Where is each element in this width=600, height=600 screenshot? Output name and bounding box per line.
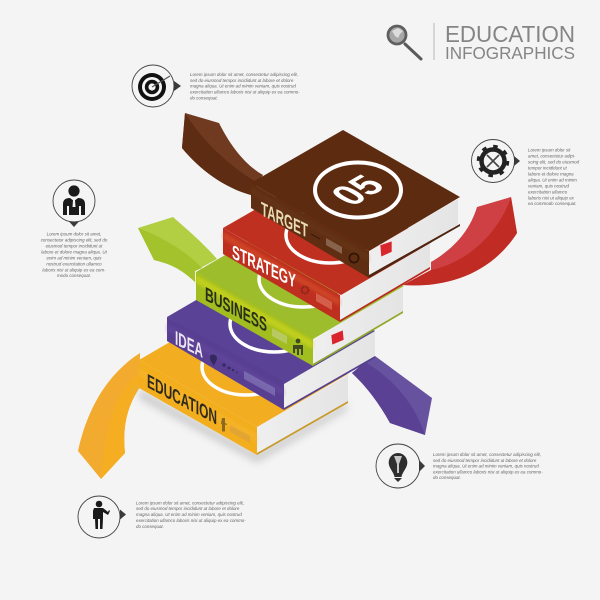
education pages — [257, 375, 348, 453]
callout: presenter — [78, 496, 246, 538]
education spine text box — [230, 425, 250, 443]
callout text: idea bulb: sed do eiusmod tempor incididunt ut labore et dolore — [433, 458, 537, 463]
business ring — [259, 251, 347, 307]
idea label: IDEA — [175, 327, 203, 363]
callout text: gear: tempor incididunt ut — [528, 166, 567, 170]
target spine text box — [326, 238, 342, 254]
callout text: gear: laboris nisi ut aliquip ex — [528, 195, 575, 200]
callout text: gear: ea commodo consequat. — [528, 201, 577, 206]
callout text: presenter: do consequat. — [136, 524, 164, 529]
education cover — [139, 307, 348, 427]
callout text: gear: amet, consectetur adipi- — [528, 154, 576, 158]
header title: EDUCATION — [445, 21, 575, 47]
header divider — [433, 23, 435, 60]
icon: people — [293, 339, 303, 355]
icon: gear badge — [472, 140, 520, 182]
education ring — [202, 339, 290, 395]
callout text: gear: veniam, quis nostrud — [528, 184, 569, 188]
arrow: purple — [352, 356, 432, 435]
strategy label: STRATEGY — [232, 241, 296, 293]
arrow: green — [138, 217, 217, 282]
callout: idea bulb — [376, 444, 543, 488]
education label: EDUCATION — [147, 370, 217, 429]
callout text: gear: scing elit, sed do eiusmod — [528, 160, 580, 164]
arrow: red — [403, 197, 517, 285]
icon: bulb badge — [376, 444, 425, 488]
callout text: presenter: exercitation ullamco laboris nisi ut aliquip ex ea commo- — [136, 518, 246, 523]
icon: target badge — [132, 65, 181, 107]
strategy spine text box — [316, 293, 332, 310]
number badge 05: 05 — [321, 169, 395, 211]
target label: TARGET — [261, 198, 308, 243]
icon: small target — [349, 253, 359, 263]
idea ring — [230, 296, 318, 352]
business cover — [196, 219, 404, 339]
callout text: presenter: magna aliqua. Ut enim ad minim veniam, quis nostrud — [136, 512, 242, 517]
book: education — [139, 307, 348, 455]
callout text: target: Lorem ipsum dolor sit amet, consectetur adipiscing elit, — [190, 72, 298, 77]
icon: businessman badge — [53, 180, 95, 227]
business pages — [313, 287, 403, 364]
callout text: target: exercitation ullamco laboris nisi ut aliquip ex ea commo- — [190, 90, 300, 94]
callout text: businessman: enim ad minim veniam, quis — [46, 256, 102, 260]
target lower cover edge — [369, 224, 460, 278]
book: target — [251, 130, 460, 278]
arrow: orange — [78, 353, 140, 479]
callout text: target: sed do eiusmod tempor incididunt ut labore et dolore — [190, 78, 294, 83]
callout text: businessman: modo consequat. — [57, 273, 91, 278]
callout text: idea bulb: do consequat. — [433, 475, 461, 480]
bookmark: red on target — [380, 241, 392, 257]
business label: BUSINESS — [205, 283, 267, 337]
callout text: idea bulb: magna aliqua. Ut enim ad minim veniam, quis nostrud — [433, 464, 539, 469]
target pages — [369, 199, 458, 276]
icon: magnifier with globe — [388, 26, 421, 59]
book: idea — [167, 264, 375, 410]
callout text: businessman: consectetur adipiscing elit, sed do — [41, 238, 108, 243]
spine pointer — [311, 234, 320, 239]
callout text: presenter: sed do eiusmod tempor incididunt ut labore et dolore — [136, 506, 240, 511]
strategy spine — [223, 228, 340, 322]
callout text: target: magna aliqua. Ut enim ad minim veniam, quis nostrud — [190, 84, 296, 89]
strategy pages — [340, 243, 430, 320]
strategy cover — [223, 175, 432, 295]
target spine — [251, 183, 369, 278]
callout text: presenter: Lorem ipsum dolor sit amet, consectetur adipiscing elit, — [136, 500, 244, 505]
business spine — [196, 272, 313, 366]
callout text: gear: aliqua. Ut enim ad minim — [528, 178, 577, 182]
book: strategy — [223, 175, 432, 322]
strategy ring — [286, 207, 374, 263]
header: education infographics — [388, 21, 575, 63]
idea cover — [167, 264, 375, 384]
icon: tiny person — [221, 418, 227, 432]
callout text: gear: exercitation ullamco — [528, 190, 568, 194]
idea pages — [284, 331, 375, 408]
callout text: businessman: laboris nisi ut aliquip ex ea com- — [42, 267, 106, 272]
callout: target — [132, 65, 300, 107]
business spine text box — [272, 328, 287, 344]
icon: pin and dots — [210, 355, 238, 373]
callout text: idea bulb: Lorem ipsum dolor sit amet, consectetur adipiscing elit, — [433, 452, 541, 457]
target cover — [251, 130, 460, 251]
idea spine — [167, 317, 284, 410]
callout text: businessman: eiusmod tempor incididunt ut — [46, 244, 103, 249]
callout text: target: do consequat. — [190, 95, 218, 100]
callout: gear — [472, 140, 580, 206]
callout text: gear: Lorem ipsum dolor sit — [528, 148, 571, 152]
icon: small gear — [302, 287, 308, 293]
callout text: idea bulb: exercitation ullamco laboris nisi ut aliquip ex ea commo- — [433, 469, 543, 474]
icon: presenter badge — [78, 496, 126, 538]
book shadow — [139, 388, 348, 463]
bookmark: red on business — [331, 330, 344, 345]
callout: businessman — [41, 180, 108, 278]
callout text: gear: labore et dolore magna — [528, 172, 574, 176]
education spine — [139, 360, 257, 455]
header subtitle: INFOGRAPHICS — [445, 43, 575, 63]
callout text: businessman: labore et dolore magna aliqua. Ut — [41, 250, 108, 254]
callout text: businessman: Lorem ipsum dolor sit amet, — [47, 232, 101, 237]
arrow: brown — [182, 113, 263, 195]
book: business — [196, 219, 404, 366]
idea spine text box — [244, 371, 275, 396]
callout text: businessman: nostrud exercitation ullamco — [46, 261, 102, 266]
